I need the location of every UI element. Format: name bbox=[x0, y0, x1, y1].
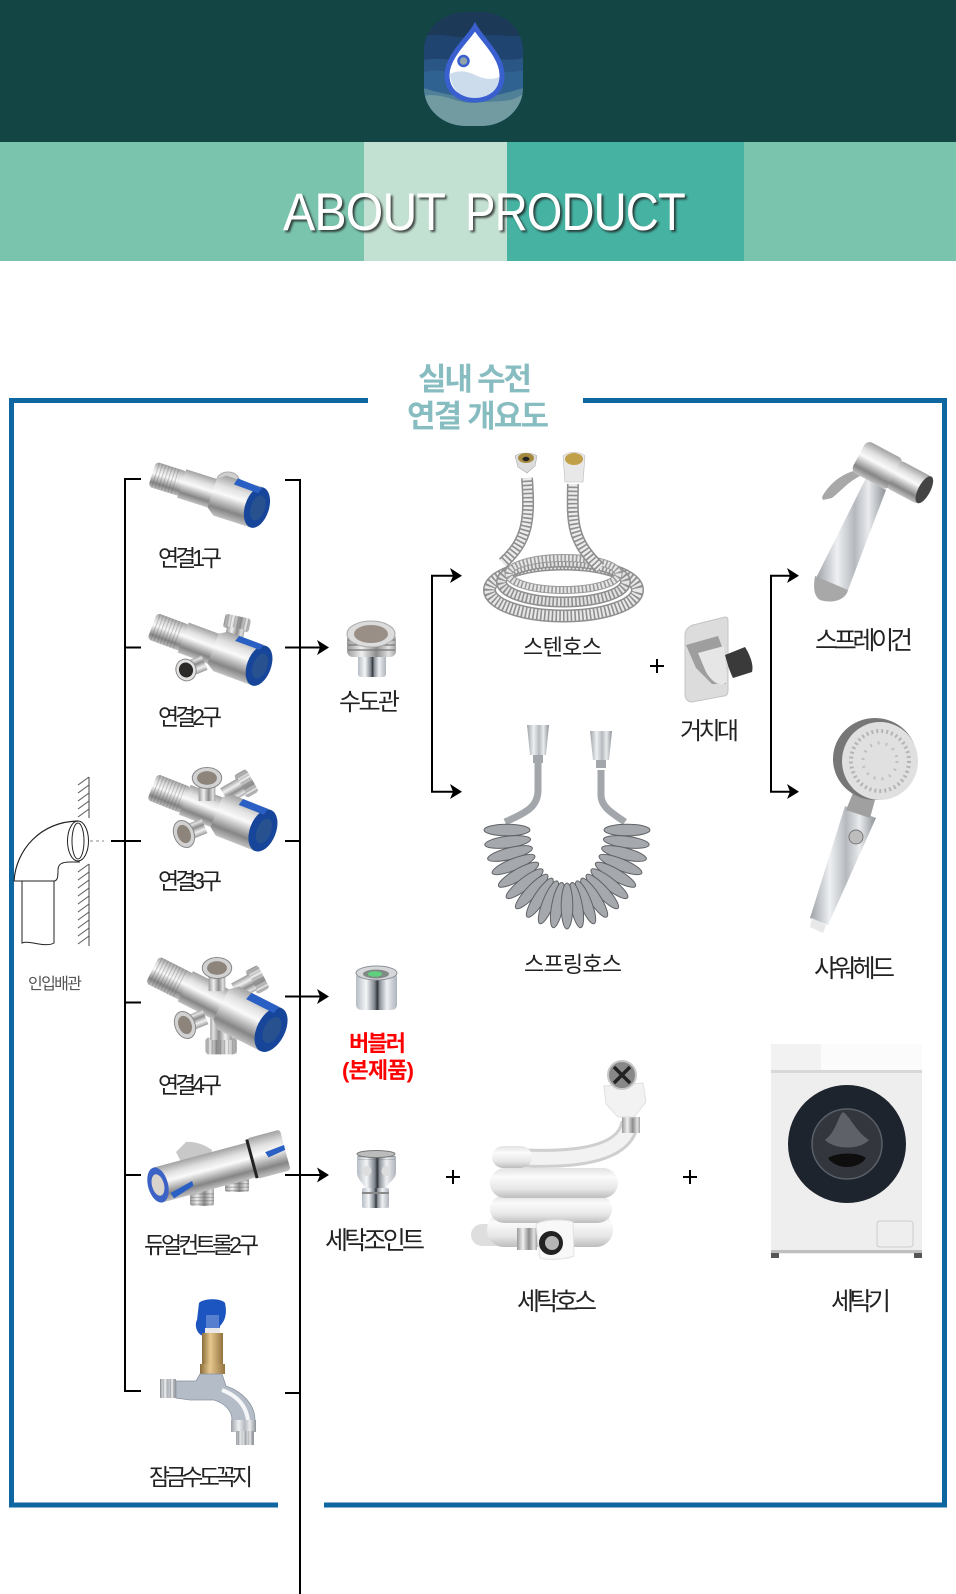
arrow: to bubbler bbox=[285, 989, 329, 1004]
label: connect 3: 연결3구 bbox=[158, 868, 222, 894]
icon: plus bbox=[446, 1170, 460, 1184]
icon: spring hose bbox=[484, 725, 650, 929]
icon: three-way valve bbox=[144, 766, 283, 856]
label: bubbler: 버블러 bbox=[349, 1031, 406, 1056]
heading: diagram title bbox=[407, 362, 549, 434]
arrow: to spray gun and shower head bbox=[771, 568, 799, 799]
icon: inlet pipe diagram bbox=[14, 777, 104, 946]
label: connect 1: 연결1구 bbox=[158, 545, 222, 571]
arrow: to tap pipe bbox=[285, 640, 329, 655]
icon: bubbler aerator bbox=[356, 966, 397, 1010]
label: inlet pipe: 인입배관 bbox=[28, 975, 82, 993]
arrow: to washer joint bbox=[285, 1168, 329, 1182]
label: shower head: 샤워헤드 bbox=[814, 955, 895, 983]
heading: diagram title: 연결 개요도 bbox=[407, 399, 549, 434]
icon: one-way valve bbox=[146, 453, 275, 531]
arrow: to hoses bbox=[432, 568, 462, 799]
icon: dual control valve bbox=[143, 1130, 291, 1207]
title: PRODUCT bbox=[465, 183, 686, 242]
icon: stainless hose bbox=[490, 452, 638, 616]
label: locking faucet: 잠금수도꼭지 bbox=[149, 1464, 253, 1490]
label: bubbler: (본제품) bbox=[342, 1058, 414, 1083]
label: connect 4: 연결4구 bbox=[158, 1072, 222, 1098]
icon: washing hose bbox=[482, 1061, 646, 1259]
icon: four-way valve bbox=[142, 948, 294, 1057]
label: stainless hose: 스텐호스 bbox=[523, 635, 602, 660]
label: washer joint: 세탁조인트 bbox=[325, 1227, 425, 1255]
icon: washer joint bbox=[357, 1150, 396, 1208]
label: tap pipe: 수도관 bbox=[339, 689, 400, 716]
label: holder: 거치대 bbox=[680, 718, 739, 745]
icon: shower head bbox=[810, 718, 918, 933]
title bbox=[283, 183, 686, 242]
icon: shower holder bbox=[685, 617, 753, 702]
panel: frame border bbox=[12, 400, 944, 1505]
icon: water drop logo bbox=[423, 12, 523, 126]
label: spring hose: 스프링호스 bbox=[524, 952, 622, 977]
label: bubbler bbox=[342, 1031, 414, 1083]
icon: tap adapter bbox=[347, 621, 396, 677]
title: ABOUT bbox=[283, 183, 446, 242]
banner stripes bbox=[0, 142, 956, 261]
connector: left bracket bbox=[111, 479, 141, 1391]
icon: plus bbox=[650, 659, 664, 673]
label: connect 2: 연결2구 bbox=[158, 704, 222, 730]
label: washing hose: 세탁호스 bbox=[517, 1288, 597, 1316]
connector: right bracket bbox=[285, 480, 300, 1594]
header band bbox=[0, 0, 956, 142]
label: washing machine: 세탁기 bbox=[831, 1288, 891, 1316]
icon: plus bbox=[683, 1170, 697, 1184]
icon: washing machine bbox=[771, 1044, 922, 1258]
label: dual control 2: 듀얼컨트롤2구 bbox=[144, 1232, 259, 1258]
heading: diagram title: 실내 수전 bbox=[418, 362, 532, 397]
icon: spray gun bbox=[814, 440, 938, 602]
icon: two-way valve bbox=[145, 606, 278, 690]
icon: locking faucet bbox=[160, 1299, 256, 1445]
label: spray gun: 스프레이건 bbox=[815, 627, 913, 655]
